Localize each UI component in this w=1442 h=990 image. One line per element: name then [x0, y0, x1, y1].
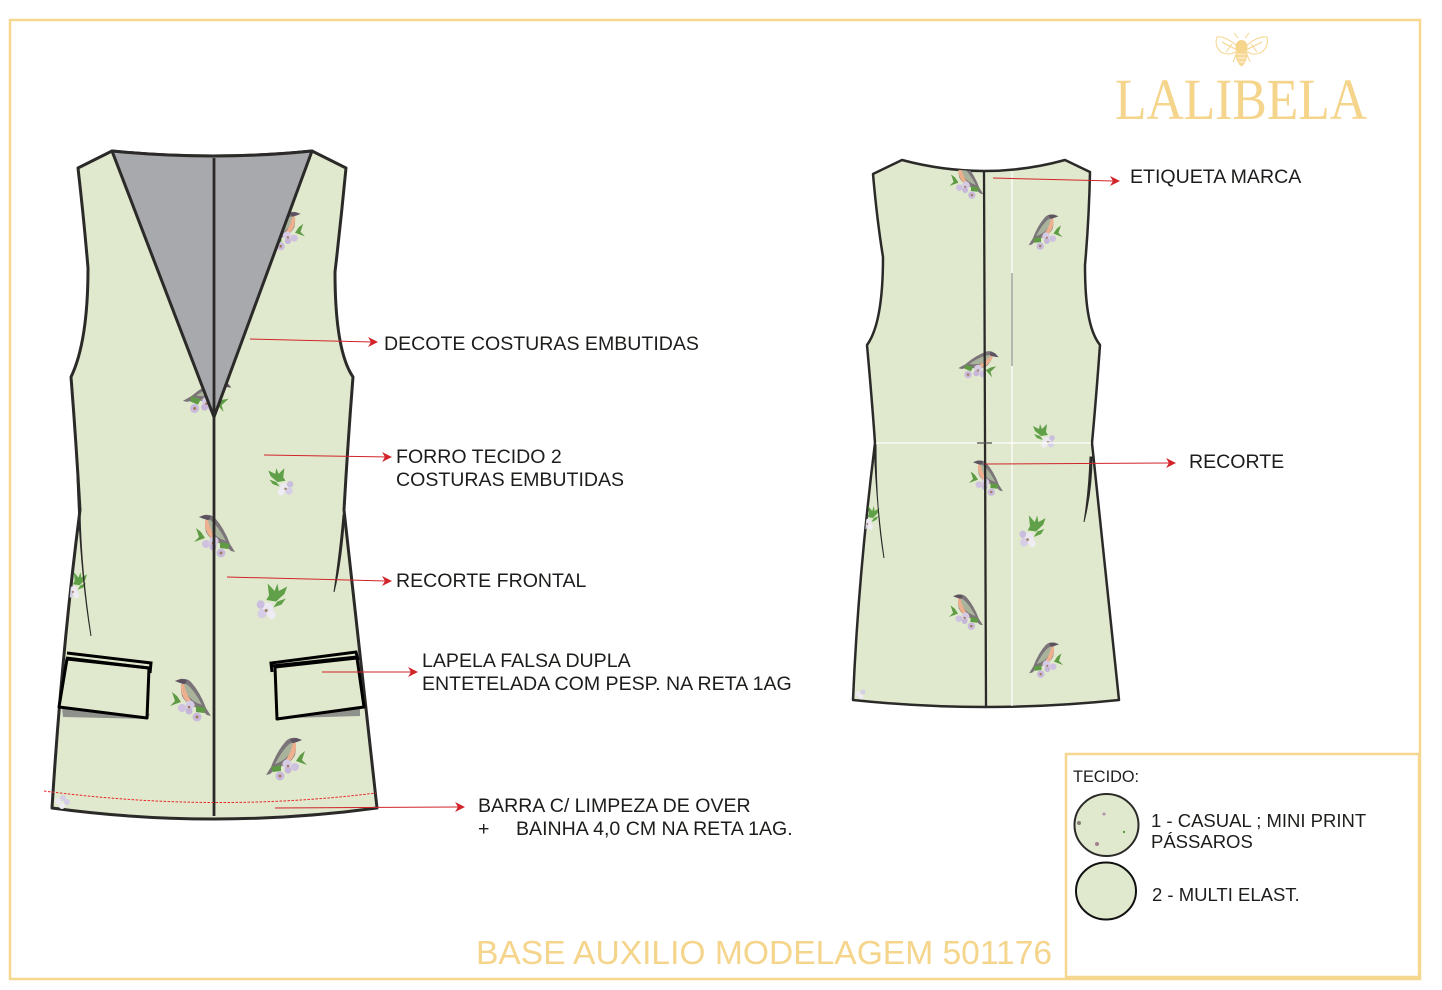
centre front seam — [213, 158, 215, 816]
front body — [52, 151, 377, 819]
label: lapela — [422, 650, 792, 695]
label: barra: BAINHA 4,0 CM NA RETA 1AG. — [516, 818, 793, 840]
label: forro: COSTURAS EMBUTIDAS — [396, 469, 624, 491]
legend heading: TECIDO: — [1073, 768, 1139, 786]
hem stitching — [44, 791, 376, 803]
label: forro — [396, 446, 624, 491]
label: barra: BARRA C/ LIMPEZA DE OVER — [478, 795, 751, 817]
label: barra: + — [478, 818, 489, 840]
back print motifs — [856, 163, 1063, 700]
swatch: fabric 2 — [1076, 862, 1136, 920]
back body — [853, 160, 1119, 707]
label: fabric 1: 1 - CASUAL ; MINI PRINT — [1151, 810, 1366, 831]
label: lapela: LAPELA FALSA DUPLA — [422, 650, 631, 672]
left pocket flap — [59, 653, 151, 719]
arrow: barra — [275, 807, 459, 808]
label: barra — [478, 795, 793, 840]
swatch: fabric 1 — [1074, 794, 1138, 856]
icon: bee — [1216, 33, 1267, 66]
arrow: decote — [250, 339, 372, 342]
brand logo — [1115, 33, 1367, 132]
arrow: forro — [264, 455, 386, 457]
panel: fabric legend — [1066, 754, 1419, 977]
right pocket flap — [271, 652, 364, 719]
label: decote: DECOTE COSTURAS EMBUTIDAS — [384, 333, 699, 355]
label: recorte frontal: RECORTE FRONTAL — [396, 570, 587, 592]
arrowheads — [368, 176, 1176, 812]
centre back seam — [984, 171, 986, 706]
label: etiqueta: ETIQUETA MARCA — [1130, 166, 1301, 188]
page title: BASE AUXILIO MODELAGEM 501176 — [476, 935, 1052, 972]
side darts — [77, 476, 345, 636]
back garment drawing — [853, 160, 1119, 707]
arrow: lapela — [322, 671, 412, 673]
arrow: etiqueta — [993, 178, 1114, 181]
logo wordmark: LALIBELA — [1115, 67, 1367, 132]
neckline lining — [112, 151, 312, 417]
front garment drawing — [44, 151, 377, 819]
callout arrows — [227, 178, 1170, 808]
label: fabric 1: PÁSSAROS — [1151, 831, 1253, 852]
label: recorte: RECORTE — [1189, 451, 1284, 473]
back inner line — [1011, 273, 1013, 366]
callout labels — [384, 166, 1301, 840]
arrow: recorte frontal — [227, 577, 386, 581]
label: fabric 2: 2 - MULTI ELAST. — [1152, 884, 1300, 905]
front print motifs — [55, 212, 307, 809]
label: forro: FORRO TECIDO 2 — [396, 446, 562, 468]
white construction lines — [876, 172, 1091, 706]
back darts — [874, 443, 1092, 558]
label: fabric 1 — [1151, 810, 1366, 852]
arrow: recorte — [985, 463, 1170, 464]
label: lapela: ENTETELADA COM PESP. NA RETA 1AG — [422, 673, 792, 695]
